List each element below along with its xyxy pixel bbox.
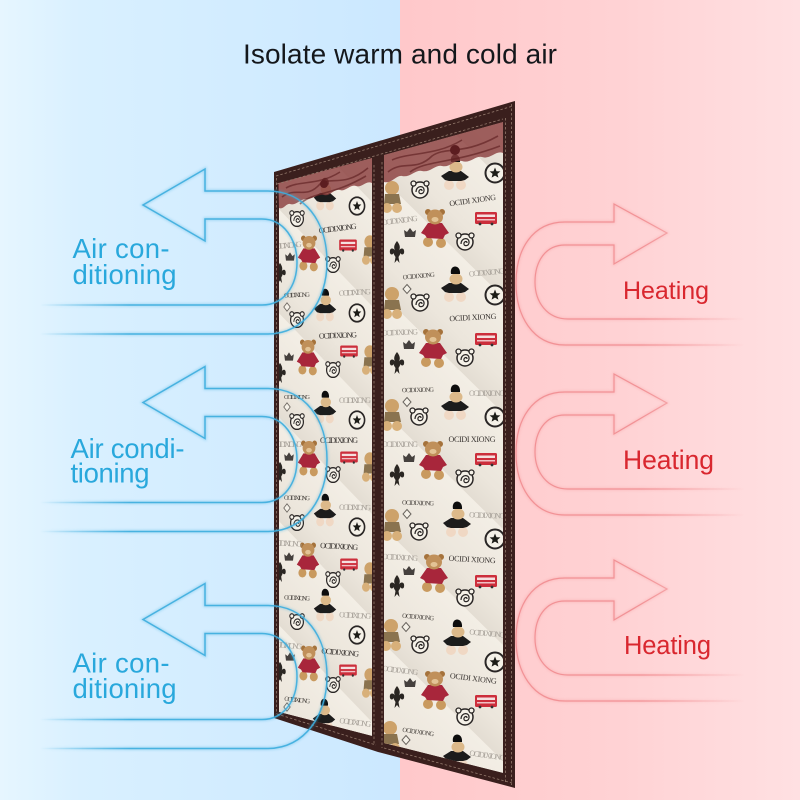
left curtain panel: OCIDI XIONG <box>272 440 302 449</box>
left curtain panel: OCIDI XIONG <box>339 287 371 298</box>
right curtain panel: OCIDI XIONG <box>382 664 419 677</box>
left curtain panel: OCIDI XIONG <box>284 696 311 705</box>
label: air conditioning 1: ditioning <box>72 259 176 290</box>
left curtain panel: OCIDI XIONG <box>320 436 358 445</box>
label: heating 1: Heating <box>623 277 709 305</box>
arrow: air conditioning 3 <box>40 584 327 748</box>
left curtain panel: OCIDI XIONG <box>320 541 359 552</box>
right curtain panel: OCIDI XIONG <box>402 499 434 508</box>
label: heating 2: Heating <box>623 445 714 475</box>
right curtain panel: OCIDI XIONG <box>449 193 497 208</box>
left curtain panel: OCIDI XIONG <box>339 716 372 729</box>
right curtain panel: OCIDI XIONG <box>403 272 435 281</box>
right curtain panel <box>380 122 506 773</box>
arrow: heating 2 <box>516 374 745 515</box>
left curtain panel: OCIDI XIONG <box>321 646 360 659</box>
label: air conditioning 3: Air con- <box>72 648 170 678</box>
arrow: air conditioning 1 <box>40 169 327 334</box>
magnetic door curtain <box>271 101 515 788</box>
right curtain panel: OCIDI XIONG <box>469 389 505 398</box>
left curtain panel: OCIDI XIONG <box>284 495 310 502</box>
right curtain panel: OCIDI XIONG <box>448 554 496 565</box>
right curtain panel: OCIDI XIONG <box>402 613 435 622</box>
arrow: air conditioning 2 <box>40 366 327 532</box>
left curtain panel: OCIDI XIONG <box>339 610 372 621</box>
right curtain panel: OCIDI XIONG <box>469 627 506 640</box>
right curtain panel: OCIDI XIONG <box>449 312 497 323</box>
label: air conditioning 3: ditioning <box>72 673 176 704</box>
right curtain panel: OCIDI XIONG <box>469 510 505 521</box>
left curtain panel: OCIDI XIONG <box>319 330 357 341</box>
label: heating 3: Heating <box>624 632 711 660</box>
background: warm side <box>400 0 800 800</box>
right curtain panel: OCIDI XIONG <box>469 749 506 763</box>
right curtain panel: OCIDI XIONG <box>382 440 418 449</box>
left curtain panel: OCIDI XIONG <box>272 538 303 549</box>
right curtain panel: OCIDI XIONG <box>448 435 496 444</box>
label: air conditioning 2: tioning <box>70 458 150 488</box>
lace valance: left panel <box>278 158 372 208</box>
arrow: heating 1 <box>516 204 745 345</box>
door frame <box>274 101 515 788</box>
left curtain panel: OCIDI XIONG <box>318 222 357 235</box>
left curtain panel: OCIDI XIONG <box>284 292 310 299</box>
left curtain panel: OCIDI XIONG <box>284 594 311 603</box>
left curtain panel <box>279 158 372 736</box>
left curtain panel: OCIDI XIONG <box>271 240 302 251</box>
frame stitching <box>276 104 513 785</box>
arrow: heating 3 <box>516 560 745 701</box>
right curtain panel: OCIDI XIONG <box>382 552 419 563</box>
right curtain panel: OCIDI XIONG <box>381 214 418 227</box>
title: Isolate warm and cold air <box>243 38 557 70</box>
right curtain panel: OCIDI XIONG <box>468 266 505 279</box>
background: cold side <box>0 0 400 800</box>
right curtain panel: OCIDI XIONG <box>449 671 497 686</box>
right curtain panel: OCIDI XIONG <box>402 387 434 394</box>
label: air conditioning 1: Air con- <box>72 233 170 264</box>
label: air conditioning 2: Air condi- <box>70 433 184 464</box>
left curtain panel: OCIDI XIONG <box>339 396 371 405</box>
right curtain panel: OCIDI XIONG <box>402 727 435 738</box>
left curtain panel: OCIDI XIONG <box>339 503 371 512</box>
left curtain panel: OCIDI XIONG <box>272 640 303 651</box>
lace valance: right panel <box>384 122 503 182</box>
right curtain panel: OCIDI XIONG <box>382 327 418 338</box>
left curtain panel: OCIDI XIONG <box>284 394 310 401</box>
